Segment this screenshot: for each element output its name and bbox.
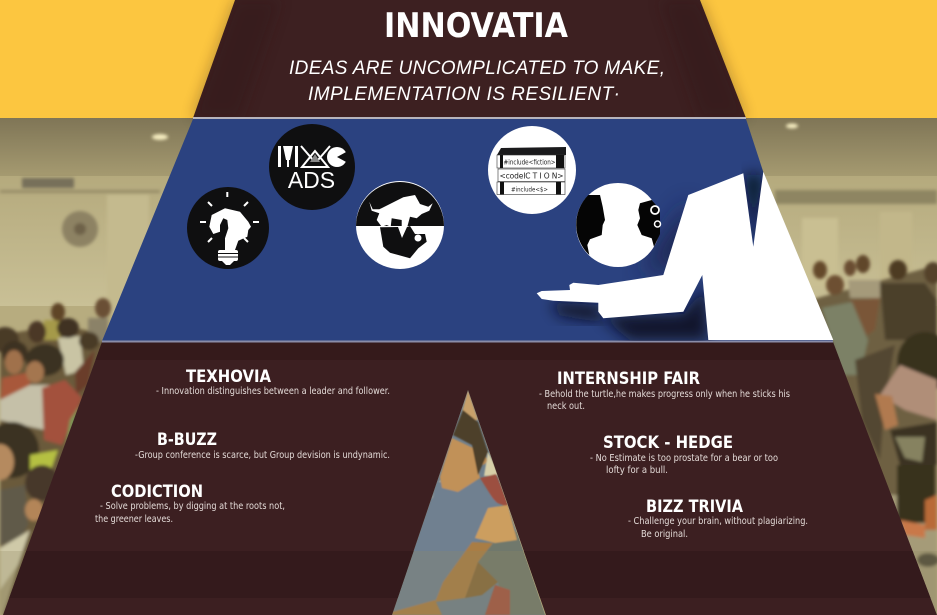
book title: include fiction: #include<fiction>: [504, 158, 556, 166]
hand figure shadow: [550, 175, 762, 340]
event: bizz trivia: - Challenge your brain, without plagiarizing.: [628, 516, 808, 527]
figure: presenter silhouette with outstretched hand: [537, 172, 833, 340]
event: codiction: [95, 482, 285, 525]
event: stock hedge: STOCK - HEDGE: [603, 433, 733, 453]
ads label: ADS: [288, 167, 335, 193]
icon: bull and bear: [356, 181, 444, 269]
icon: ads logo: [269, 124, 355, 210]
event: internship fair: neck out.: [547, 401, 585, 412]
bottom strip tint on photo: [0, 551, 937, 615]
event: internship fair: - Behold the turtle,he makes progress only when he sticks his: [539, 389, 790, 400]
tagline: [289, 58, 665, 105]
event: b-buzz: -Group conference is scarce, but Group devision is undynamic.: [135, 450, 390, 461]
top panel: [193, 0, 746, 118]
event: bizz trivia: [628, 497, 808, 540]
event: texhovia: [156, 367, 390, 397]
blue panel: [102, 117, 833, 342]
icon: question mark light bulb: [187, 187, 269, 269]
icon: codefiction books: [488, 126, 576, 214]
photo: presenter in centre triangle: [385, 385, 550, 615]
event: b-buzz: B-BUZZ: [157, 430, 217, 450]
photo: audience right: [810, 255, 937, 615]
event: bizz trivia: Be original.: [641, 529, 688, 540]
event: codiction: CODICTION: [111, 482, 203, 502]
icon: two heads: [576, 183, 660, 267]
photo: audience left: [0, 298, 111, 615]
event: internship fair: INTERNSHIP FAIR: [557, 369, 700, 389]
event: bizz trivia: BIZZ TRIVIA: [646, 497, 744, 517]
tagline: IDEAS ARE UNCOMPLICATED TO MAKE,: [289, 58, 665, 79]
book title: codefiction: <codeIC T I O N>: [500, 172, 564, 180]
event: codiction: - Solve problems, by digging at the roots not,: [100, 501, 285, 512]
event: internship fair: [539, 369, 790, 412]
event: stock hedge: lofty for a bull.: [606, 465, 668, 476]
event: texhovia: - Innovation distinguishes between a leader and follower.: [156, 386, 390, 397]
yellow top band: [0, 0, 937, 118]
title: INNOVATIA: [384, 6, 569, 46]
event: stock hedge: [590, 433, 778, 476]
tagline: IMPLEMENTATION IS RESILIENT·: [308, 84, 620, 105]
event: texhovia: TEXHOVIA: [186, 367, 272, 387]
book title: include dollar: #include<$>: [511, 186, 548, 194]
event: codiction: the greener leaves.: [95, 514, 173, 525]
event: b-buzz: [135, 430, 390, 461]
lower panel: [0, 342, 937, 615]
event: stock hedge: - No Estimate is too prostate for a bear or too: [590, 453, 778, 464]
